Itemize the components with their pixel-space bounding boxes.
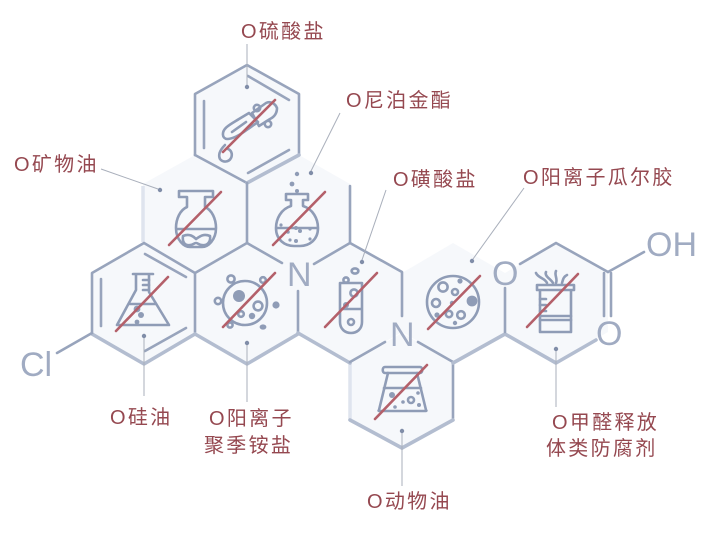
label: 甲醛释放体类防腐剂: O甲醛释放 [552, 412, 659, 434]
label: 甲醛释放体类防腐剂: 体类防腐剂 [546, 437, 658, 460]
icon: round flask with bubbles [276, 172, 318, 246]
icon: petri dish [427, 276, 479, 328]
leader lines and dots [101, 44, 558, 486]
icon: flat flask [379, 367, 426, 411]
atom labels: Cl [20, 346, 52, 384]
label: 尼泊金酯: O尼泊金酯 [346, 89, 453, 112]
red slash: round flask [273, 192, 325, 245]
atom labels: OH [646, 226, 697, 264]
red slash: beaker [527, 274, 578, 327]
atom labels: N [390, 316, 415, 354]
red slash: cell [223, 273, 275, 327]
icon: dropper [219, 102, 277, 162]
label: 动物油: O动物油 [367, 490, 452, 513]
soft bevel edges [143, 186, 350, 420]
red slash: conical flask [116, 277, 168, 331]
icon: flask with mask [176, 191, 216, 247]
label: 阳离子瓜尔胶: O阳离子瓜尔胶 [523, 166, 675, 189]
label: 磺酸盐: O磺酸盐 [393, 168, 478, 191]
red slash: petri dish [428, 276, 480, 329]
label: 硫酸盐: O硫酸盐 [241, 20, 326, 43]
label: 阳离子聚季铵盐: O阳离子 [209, 408, 294, 430]
atom labels: O [596, 315, 622, 353]
molecule hexagon fills [92, 65, 608, 447]
red slash: dropper [223, 100, 275, 152]
red slash: flask with mask [169, 192, 221, 245]
label: 硅油: O硅油 [110, 406, 172, 429]
label: 矿物油: O矿物油 [14, 153, 99, 176]
label: 阳离子聚季铵盐: 聚季铵盐 [204, 434, 293, 457]
atom labels [20, 226, 697, 384]
atom labels: O [492, 255, 518, 293]
icon: conical flask [117, 274, 169, 325]
icon: beaker with steam [536, 271, 574, 332]
icon: cell [215, 275, 280, 330]
atom labels: N [287, 256, 312, 294]
red slash: flat flask [375, 365, 427, 419]
icon: test tube [340, 268, 362, 333]
red slash: test tube [325, 273, 377, 327]
molecule skeleton lines [57, 65, 644, 448]
